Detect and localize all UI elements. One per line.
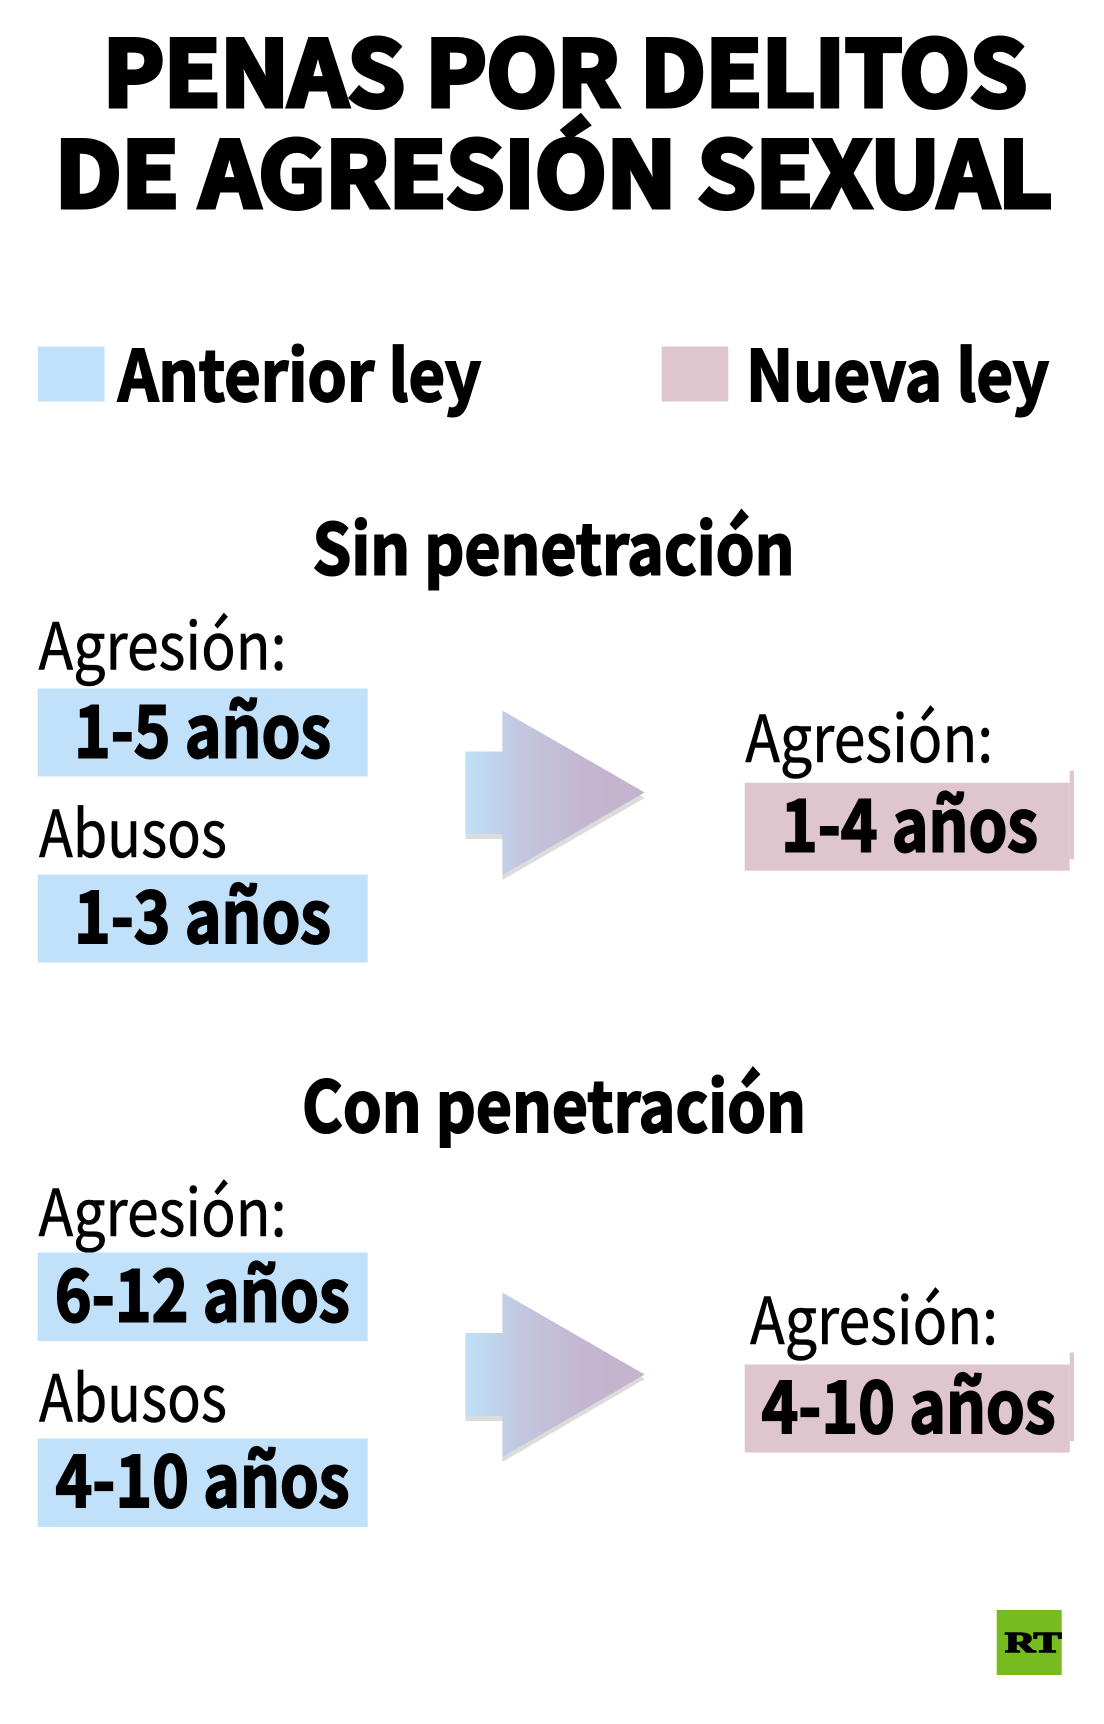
label: agresión: Agresión: — [745, 687, 993, 781]
label: abusos: Abusos — [39, 1346, 227, 1440]
heading: sin penetración: Sin penetración — [312, 494, 794, 596]
panel: con penetración, anterior ley — [38, 1161, 368, 1528]
value box: 1-3 años: 1-3 años — [74, 859, 331, 964]
label: agresión: Agresión: — [750, 1269, 998, 1363]
title — [55, 2, 1052, 233]
icon: RT logo: RT — [1005, 1627, 1062, 1659]
label: agresión: Agresión: — [38, 594, 286, 688]
title: DE AGRESIÓN SEXUAL — [55, 103, 1052, 233]
legend: anterior ley: Anterior ley — [117, 321, 481, 422]
value box: 6-12 años: 6-12 años — [55, 1238, 350, 1342]
value box: 4-10 años: 4-10 años — [762, 1349, 1056, 1454]
icon: RT logo — [997, 1610, 1062, 1675]
title: PENAS POR DELITOS — [103, 2, 1027, 132]
legend: nueva ley: Nueva ley — [746, 321, 1049, 422]
heading: con penetración: Con penetración — [302, 1052, 806, 1153]
panel: sin penetración, anterior ley — [38, 594, 368, 964]
panel: sin penetración, nueva ley — [745, 687, 1074, 872]
value box: 1-5 años: 1-5 años — [74, 674, 331, 778]
arrow: sin penetración — [465, 710, 645, 880]
label: abusos: Abusos — [39, 782, 227, 876]
value box: 1-4 años: 1-4 años — [781, 768, 1038, 872]
arrow: con penetración — [465, 1292, 645, 1462]
panel: con penetración, nueva ley — [745, 1269, 1074, 1454]
label: agresión: Agresión: — [38, 1161, 286, 1255]
value box: 4-10 años: 4-10 años — [56, 1423, 350, 1528]
